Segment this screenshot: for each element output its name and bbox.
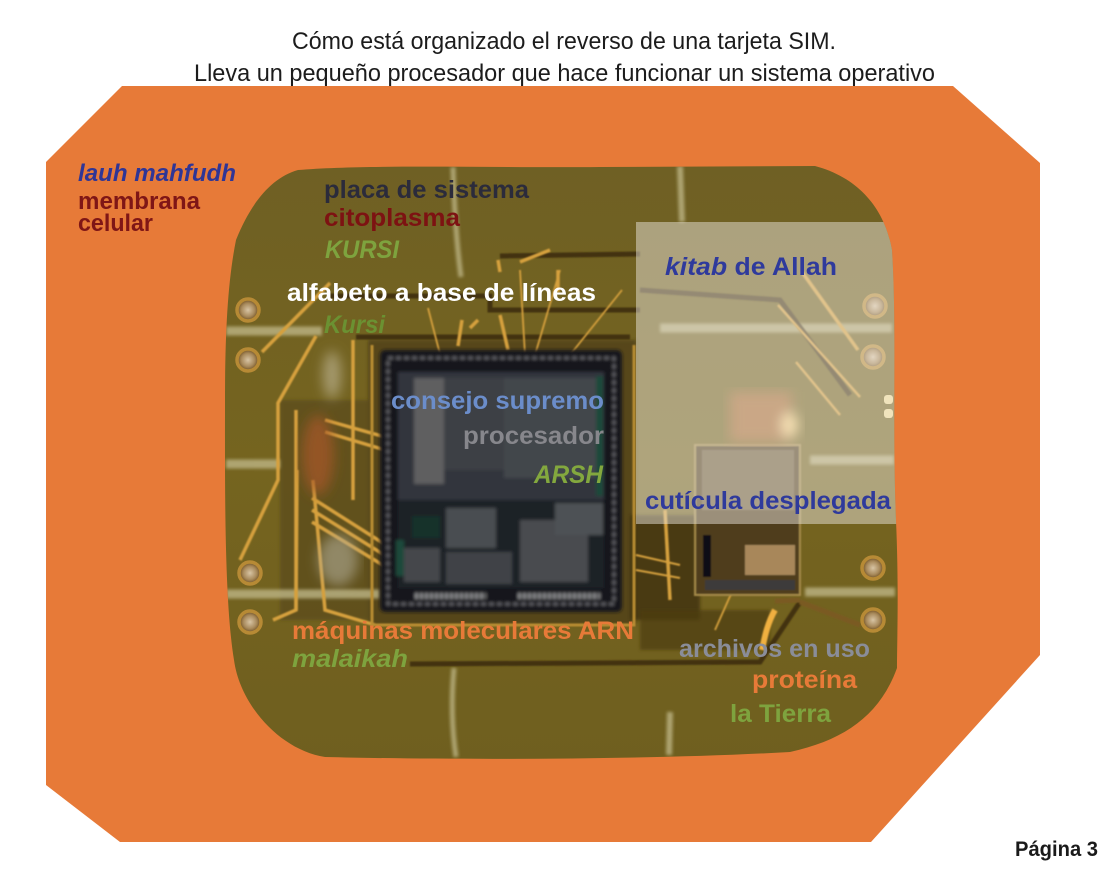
page number: Página 3 bbox=[1015, 838, 1098, 861]
label: proteína: proteína bbox=[752, 666, 858, 694]
label: archivos en uso: archivos en uso bbox=[679, 635, 870, 663]
chip board bbox=[220, 160, 900, 765]
board light scratches bbox=[226, 166, 895, 757]
title: Lleva un pequeño procesador que hace funcionar un sistema operativo bbox=[194, 60, 935, 87]
SIM chip photo bbox=[220, 160, 900, 765]
dark recess around processor bbox=[280, 340, 770, 650]
label: placa de sistema: placa de sistema bbox=[324, 176, 530, 204]
label: cutícula desplegada: cutícula desplegada bbox=[645, 487, 892, 515]
label: procesador: procesador bbox=[463, 422, 604, 450]
contact pads bbox=[237, 295, 893, 633]
label: kitab de Allah: kitab de Allah bbox=[665, 253, 837, 281]
label: alfabeto a base de líneas: alfabeto a base de líneas bbox=[287, 279, 596, 307]
glowing contact area bbox=[730, 392, 798, 442]
label: KURSI: KURSI bbox=[325, 236, 400, 264]
label: ARSH: ARSH bbox=[533, 461, 604, 489]
label: máquinas moleculares ARN: máquinas moleculares ARN bbox=[292, 617, 634, 645]
processor die bbox=[380, 350, 622, 612]
gold traces bbox=[240, 250, 860, 650]
label: membrana celular: membrana bbox=[78, 188, 201, 215]
label: consejo supremo: consejo supremo bbox=[391, 387, 604, 415]
label: Kursi: Kursi bbox=[324, 311, 386, 339]
title bbox=[194, 28, 935, 87]
title: Cómo está organizado el reverso de una tarjeta SIM. bbox=[292, 28, 836, 55]
dark copper tracks bbox=[330, 254, 850, 664]
label: citoplasma: citoplasma bbox=[324, 204, 461, 232]
secondary component bbox=[695, 445, 800, 595]
orange SIM card background bbox=[46, 86, 1040, 842]
label: malaikah: malaikah bbox=[292, 645, 408, 673]
reddish and pale patch beside processor bbox=[302, 351, 358, 586]
label: membrana celular bbox=[78, 188, 201, 237]
label: lauh mahfudh: lauh mahfudh bbox=[78, 160, 236, 187]
label: membrana celular: celular bbox=[78, 210, 153, 237]
translucent panel: kitab bbox=[636, 222, 898, 524]
label: la Tierra: la Tierra bbox=[730, 700, 832, 728]
